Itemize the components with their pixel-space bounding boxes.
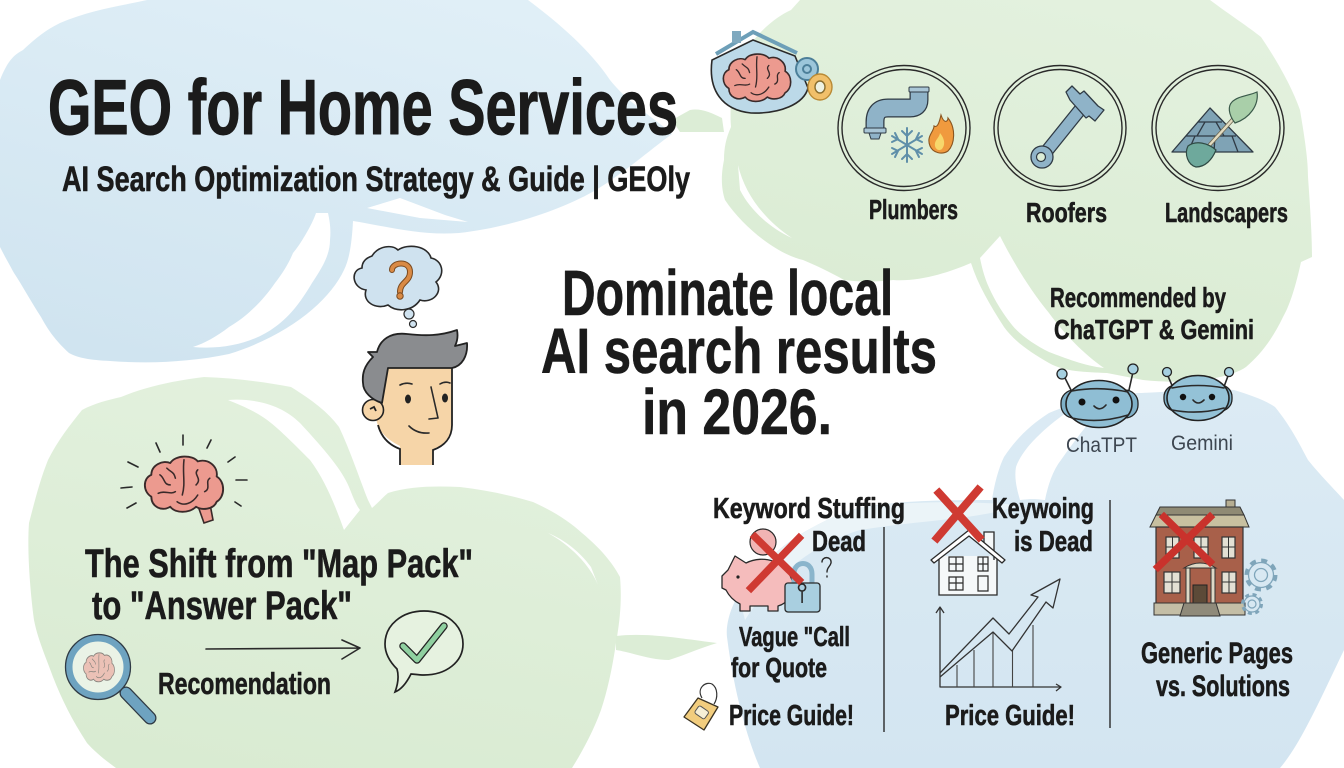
- icon: house with brain: [711, 31, 832, 113]
- headline: AI search results: [541, 315, 937, 387]
- divider right: [1109, 500, 1111, 728]
- chart: growth arrow: [936, 579, 1061, 691]
- white gap in blue wash: [193, 198, 468, 348]
- label: Generic Pages: [1141, 637, 1293, 670]
- hair: [363, 330, 467, 403]
- icon: hammer: [1031, 86, 1104, 168]
- label: vague: Vague "Call: [739, 621, 850, 652]
- ring: [994, 66, 1126, 190]
- icon: glowing brain: [121, 435, 247, 523]
- label: vs. Solutions: [1156, 670, 1290, 703]
- icon: pipe: [864, 87, 929, 139]
- icon: roof tiles: [1172, 108, 1253, 152]
- label: ChaTPT: ChaTPT: [1066, 434, 1137, 457]
- connector tail: title to services: [672, 109, 724, 132]
- icon: Gemini robot: [1162, 368, 1234, 420]
- white gap in lower blue wash: [1015, 404, 1106, 500]
- headline: in 2026.: [642, 376, 832, 448]
- heading: [713, 493, 905, 558]
- icon: speech bubble check: [385, 611, 463, 692]
- heading: Dead: [812, 526, 866, 558]
- label: recomendation: Recomendation: [158, 666, 331, 701]
- panel: roofers: [994, 66, 1126, 228]
- label: price guide: Price Guide!: [945, 700, 1075, 732]
- red cross: [937, 490, 979, 538]
- panel: green wash bottom left: [28, 377, 621, 768]
- heading: Keyword Stuffing: [713, 493, 905, 525]
- white gaps in green wash: [738, 165, 1104, 368]
- icon: ChaTPT robot: [1057, 364, 1138, 428]
- label: vague: for Quote: [731, 652, 827, 683]
- connector tail: green to blue: [616, 635, 717, 660]
- icon: house: [931, 530, 1005, 595]
- label: [1141, 637, 1293, 703]
- panel: landscapers: [1152, 66, 1288, 228]
- red cross: [751, 537, 799, 588]
- red cross: [1158, 517, 1210, 567]
- face details: [400, 382, 450, 433]
- label: price guide: Price Guide!: [729, 700, 854, 732]
- heading: is Dead: [1014, 526, 1093, 558]
- white gaps in lower green wash: [228, 400, 598, 585]
- panel: column generic pages: [1141, 500, 1293, 703]
- question mark: [392, 264, 410, 299]
- panel: green wash top right: [722, 0, 1312, 382]
- panel: plumbers: [838, 66, 970, 225]
- ring: [838, 66, 970, 190]
- recommended heading: ChaTGPT & Gemini: [1054, 314, 1254, 345]
- arrow: map pack to answer pack: [206, 640, 360, 659]
- headline: [541, 257, 937, 448]
- icon: snowflake: [892, 128, 922, 162]
- divider left: [883, 527, 885, 732]
- icon: gears: [1242, 560, 1276, 614]
- panel: blue wash bottom right: [727, 389, 1344, 768]
- heading: shift: to "Answer Pack": [92, 584, 352, 628]
- pale band in blue wash: [740, 502, 1020, 620]
- icon: flame: [929, 115, 954, 153]
- title: GEO for Home Services: [48, 63, 678, 151]
- label: vague: [731, 621, 850, 683]
- heading: [992, 493, 1094, 558]
- label: Plumbers: [869, 194, 958, 225]
- icon: piggy bank: [722, 529, 831, 612]
- label: Roofers: [1026, 197, 1107, 228]
- thought cloud: [354, 246, 442, 310]
- panel: blue wash top left: [0, 0, 672, 362]
- neck and face: [376, 368, 452, 465]
- recommended heading: [1050, 282, 1254, 345]
- icon: magnifier: [66, 634, 150, 718]
- recommended heading: Recommended by: [1050, 282, 1226, 313]
- icon: thinking person: [354, 246, 467, 465]
- icon: brick building: [1150, 500, 1249, 616]
- headline: Dominate local: [562, 257, 893, 329]
- heading: Keywoing: [992, 493, 1094, 525]
- icon: price tag: [684, 683, 718, 730]
- label: Landscapers: [1165, 197, 1288, 228]
- icon: shovel: [1186, 92, 1257, 167]
- label: Gemini: Gemini: [1171, 432, 1233, 455]
- subtitle: AI Search Optimization Strategy & Guide | GEOly: [62, 160, 690, 199]
- heading: shift: The Shift from "Map Pack": [85, 542, 473, 586]
- panel: column keyword stuffing: [684, 493, 905, 732]
- heading: shift: [85, 542, 473, 628]
- ring: [1152, 66, 1284, 190]
- panel: column keywoing: [931, 490, 1094, 732]
